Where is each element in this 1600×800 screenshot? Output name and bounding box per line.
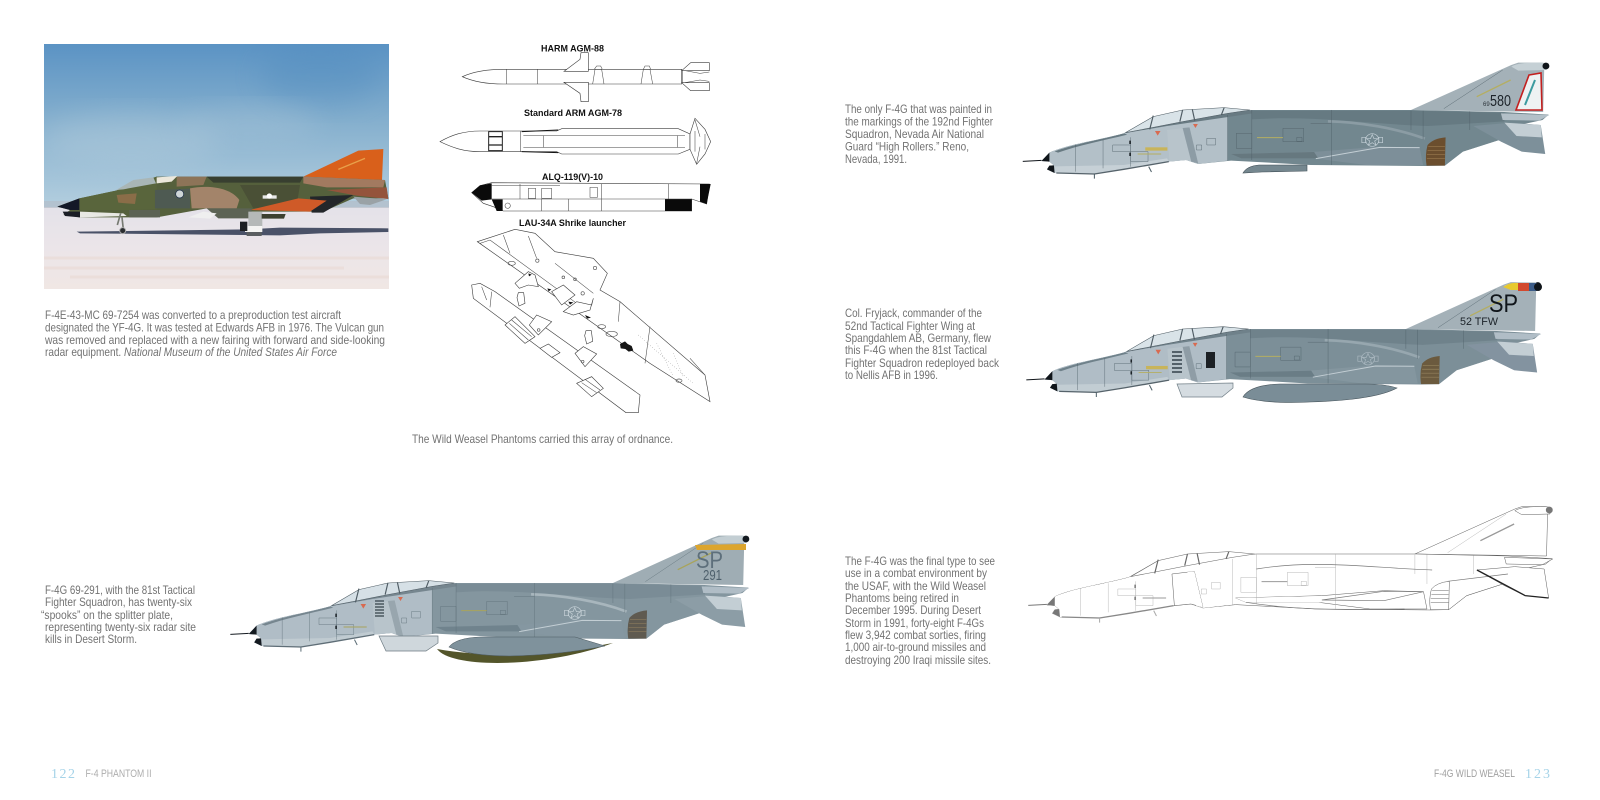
aircraft: F-4G line drawing	[1028, 507, 1553, 623]
caption: final type in combat: the USAF, with the Wild Weasel	[845, 579, 986, 593]
photo ground	[44, 207, 389, 289]
splitter plate spooks	[375, 601, 384, 616]
airframe	[230, 536, 749, 652]
diagram: HARM missile	[462, 53, 709, 102]
caption: YF-4G photo: was removed and replaced with a new fairing with forward and side-looking	[44, 333, 385, 347]
splitter plate marks	[1172, 352, 1182, 372]
caption: YF-4G photo: F-4E-43-MC 69-7254 was converted to a preproduction test aircraft	[45, 308, 342, 322]
centerline tank shadow edge	[437, 643, 613, 663]
yellow fin band	[695, 544, 746, 550]
aircraft in photo	[57, 149, 388, 236]
caption: Col. Fryjack: Fighter Squadron redeployed back	[845, 356, 1000, 370]
caption: 192nd Fighter Squadron: the markings of the 192nd Fighter	[845, 114, 993, 128]
aircraft: F-4G 52nd TFW	[1026, 282, 1542, 402]
aircraft: F-4G High Rollers	[1023, 63, 1549, 179]
caption: Col. Fryjack: to Nellis AFB in 1996.	[845, 368, 938, 382]
caption: 192nd Fighter Squadron: Guard “High Rollers.” Reno,	[845, 140, 969, 154]
caption: F-4G 69-291: “spooks” on the splitter plate,	[41, 608, 173, 622]
fin tip red	[1518, 283, 1529, 291]
centerline tank	[449, 637, 605, 656]
caption: 192nd Fighter Squadron: Nevada, 1991.	[845, 152, 907, 166]
label: Standard ARM: Standard ARM AGM-78	[524, 108, 622, 119]
caption: Col. Fryjack: this F-4G when the 81st Tactical	[845, 343, 987, 357]
label: LAU-34A: LAU-34A Shrike launcher	[519, 218, 626, 229]
airframe	[1026, 282, 1541, 397]
caption: 192nd Fighter Squadron	[845, 102, 993, 166]
caption: final type in combat: The F-4G was the final type to see	[845, 554, 995, 568]
wing badge	[1206, 352, 1215, 368]
caption: Col. Fryjack	[845, 306, 1000, 382]
fin serial 291: 291	[703, 567, 722, 584]
fin code 580: 580	[1490, 93, 1511, 110]
fin flash	[1516, 73, 1542, 110]
diagram: Standard ARM missile	[440, 118, 711, 164]
ordnance diagrams	[440, 44, 711, 413]
fin code SP: SP	[1489, 290, 1518, 318]
footer right: page number: 123	[1525, 767, 1550, 782]
diagram: ALQ-119 pod	[472, 183, 711, 211]
stabilator bold edge	[1477, 570, 1549, 598]
interior structure lines	[1246, 564, 1508, 610]
airframe	[1023, 63, 1549, 179]
fin AF 69: 69	[1483, 102, 1490, 108]
caption: F-4G 69-291: F-4G 69-291, with the 81st Tactical	[45, 583, 195, 597]
caption: 192nd Fighter Squadron: The only F-4G that was painted in	[845, 102, 992, 116]
caption: final type in combat: December 1995. During Desert	[845, 603, 982, 617]
centerline tank	[1243, 384, 1397, 402]
caption: final type in combat: destroying 200 Iraqi missile sites.	[845, 653, 991, 667]
caption: final type in combat	[845, 554, 995, 667]
gun fairing	[1177, 383, 1233, 397]
caption: F-4G 69-291: representing twenty-six radar site	[45, 620, 196, 634]
fin tip blue	[1529, 283, 1537, 291]
label: HARM: HARM AGM-88	[541, 44, 604, 54]
aircraft: F-4G 69-291, 81st TFS	[230, 536, 749, 663]
caption: Col. Fryjack: 52nd Tactical Fighter Wing at	[845, 319, 976, 333]
photo sky	[44, 44, 389, 209]
caption: YF-4G photo	[44, 308, 385, 359]
fin tip black	[1534, 283, 1542, 291]
caption: final type in combat: Phantoms being retired in	[845, 591, 959, 605]
footer left: page number: 122	[51, 767, 75, 782]
gun fairing	[379, 636, 438, 651]
caption: Col. Fryjack: Col. Fryjack, commander of the	[845, 306, 982, 320]
footer left: running title: F-4 PHANTOM II	[86, 768, 152, 780]
diagram: LAU-34A launcher	[472, 229, 710, 413]
fin tip yellow	[1503, 283, 1518, 290]
photo: YF-4G on the lakebed at Edwards AFB	[40, 44, 389, 289]
caption: F-4G 69-291: Fighter Squadron, has twenty-six	[45, 595, 192, 609]
label: ALQ-119: ALQ-119(V)-10	[542, 172, 603, 183]
caption: F-4G 69-291: kills in Desert Storm.	[45, 632, 137, 646]
caption: final type in combat: use in a combat environment by	[845, 566, 987, 580]
caption: YF-4G photo: designated the YF-4G. It was tested at Edwards AFB in 1976. The Vulcan gun	[45, 320, 384, 334]
caption: final type in combat: flew 3,942 combat sorties, firing	[845, 628, 986, 642]
caption: final type in combat: Storm in 1991, forty-eight F-4Gs	[845, 616, 984, 630]
caption: Col. Fryjack: Spangdahlem AB, Germany, flew	[845, 331, 991, 345]
caption: ordnance: The Wild Weasel Phantoms carried this array of ordnance.	[412, 432, 673, 446]
underwing pod	[1243, 165, 1307, 173]
caption: YF-4G photo: radar equipment. National Museum of the United States Air Force	[45, 345, 337, 359]
fin stripe	[1525, 80, 1535, 105]
fin code SP: SP	[696, 547, 723, 574]
caption: F-4G 69-291	[41, 583, 196, 646]
caption: final type in combat: 1,000 air-to-ground missiles and	[845, 640, 986, 654]
footer right: running title: F-4G WILD WEASEL	[1434, 768, 1515, 780]
airframe outline	[1028, 507, 1553, 623]
fin 52 TFW: 52 TFW	[1460, 316, 1499, 328]
caption: 192nd Fighter Squadron: Squadron, Nevada Air National	[845, 127, 984, 141]
